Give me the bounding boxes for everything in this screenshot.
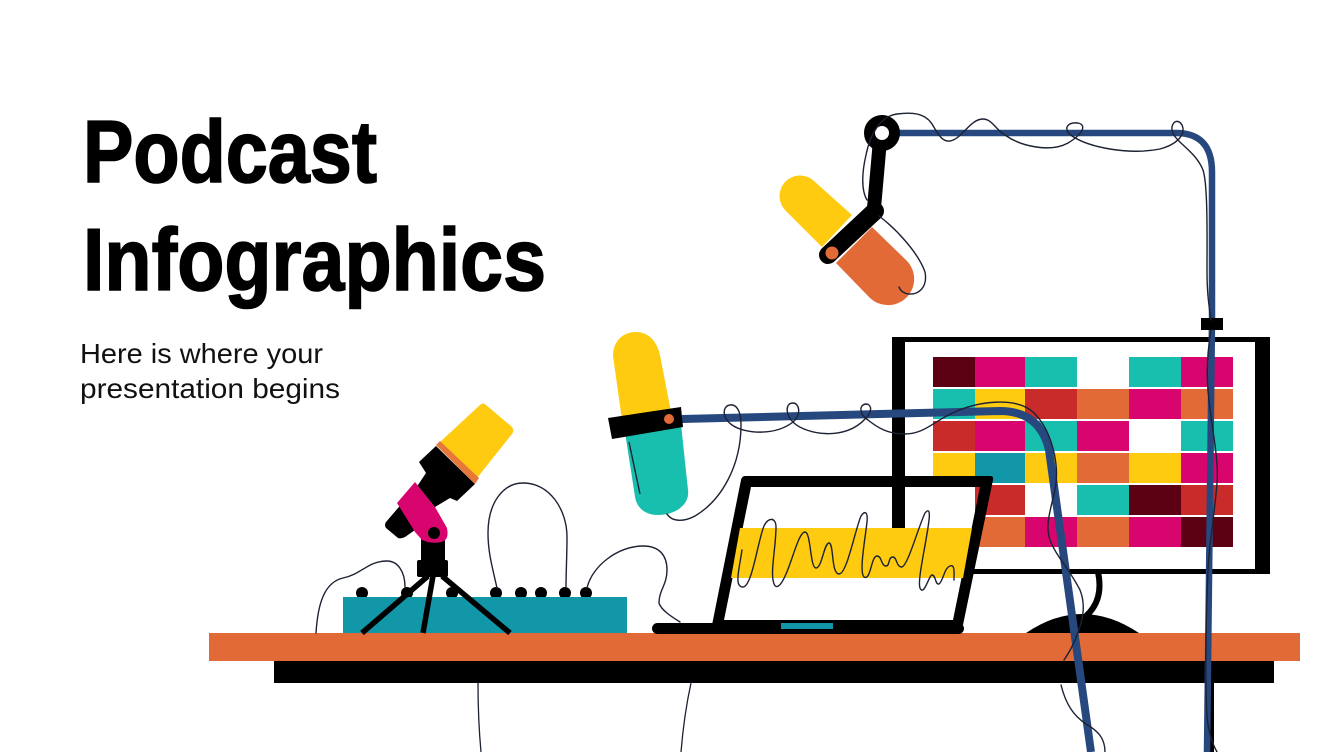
laptop bbox=[652, 476, 993, 634]
mixer body bbox=[343, 597, 627, 633]
mixer knobs bbox=[356, 587, 592, 599]
laptop frame bbox=[712, 476, 993, 625]
subtitle: presentation begins bbox=[80, 373, 340, 404]
subtitle: Here is where your bbox=[80, 338, 323, 369]
laptop base bbox=[652, 623, 964, 634]
waveform bbox=[738, 511, 954, 590]
title: Podcast bbox=[83, 102, 377, 201]
monitor colour grid bbox=[933, 357, 1233, 547]
microphone ring bbox=[436, 441, 479, 484]
side mic highlight bbox=[629, 442, 640, 494]
laptop screen band bbox=[731, 528, 972, 578]
side mic cable bbox=[667, 402, 1083, 660]
microphone clamp bbox=[397, 482, 448, 543]
tripod bbox=[362, 530, 510, 633]
hanging mic dot bbox=[826, 246, 838, 260]
title: Infographics bbox=[83, 210, 546, 309]
trackpad notch bbox=[781, 623, 833, 629]
long cable down monitor bbox=[1206, 330, 1217, 752]
hanging microphone bbox=[779, 120, 914, 305]
microphone head bbox=[440, 404, 513, 478]
hanging mic pivot bbox=[870, 120, 894, 146]
monitor bbox=[892, 337, 1270, 633]
monitor stand bbox=[1026, 572, 1139, 633]
boom clamp bbox=[1201, 318, 1223, 330]
top boom arm bbox=[895, 133, 1212, 752]
subtitle bbox=[80, 338, 340, 404]
audio mixer bbox=[316, 483, 680, 633]
microphone handle bbox=[385, 446, 475, 538]
side mic dot bbox=[664, 414, 674, 424]
side mic teal body bbox=[625, 424, 688, 515]
hanging mic orange body bbox=[836, 227, 914, 305]
desk bbox=[209, 633, 1300, 752]
hanging mic band bbox=[828, 211, 875, 255]
mixer cables bbox=[316, 483, 680, 633]
tabletop microphone bbox=[362, 404, 513, 633]
hanging mic yellow body bbox=[779, 175, 852, 247]
side boom arm bbox=[682, 411, 1091, 752]
side mic yellow body bbox=[613, 332, 671, 420]
side microphone bbox=[608, 332, 688, 515]
hanging mic cable loop bbox=[879, 216, 926, 294]
hanging mic arm bbox=[874, 140, 880, 208]
monitor frame bbox=[892, 337, 1270, 574]
side mic band bbox=[608, 407, 683, 439]
title bbox=[83, 102, 546, 309]
top boom cable bbox=[863, 113, 1211, 320]
side mic cable below desk bbox=[1061, 685, 1105, 752]
